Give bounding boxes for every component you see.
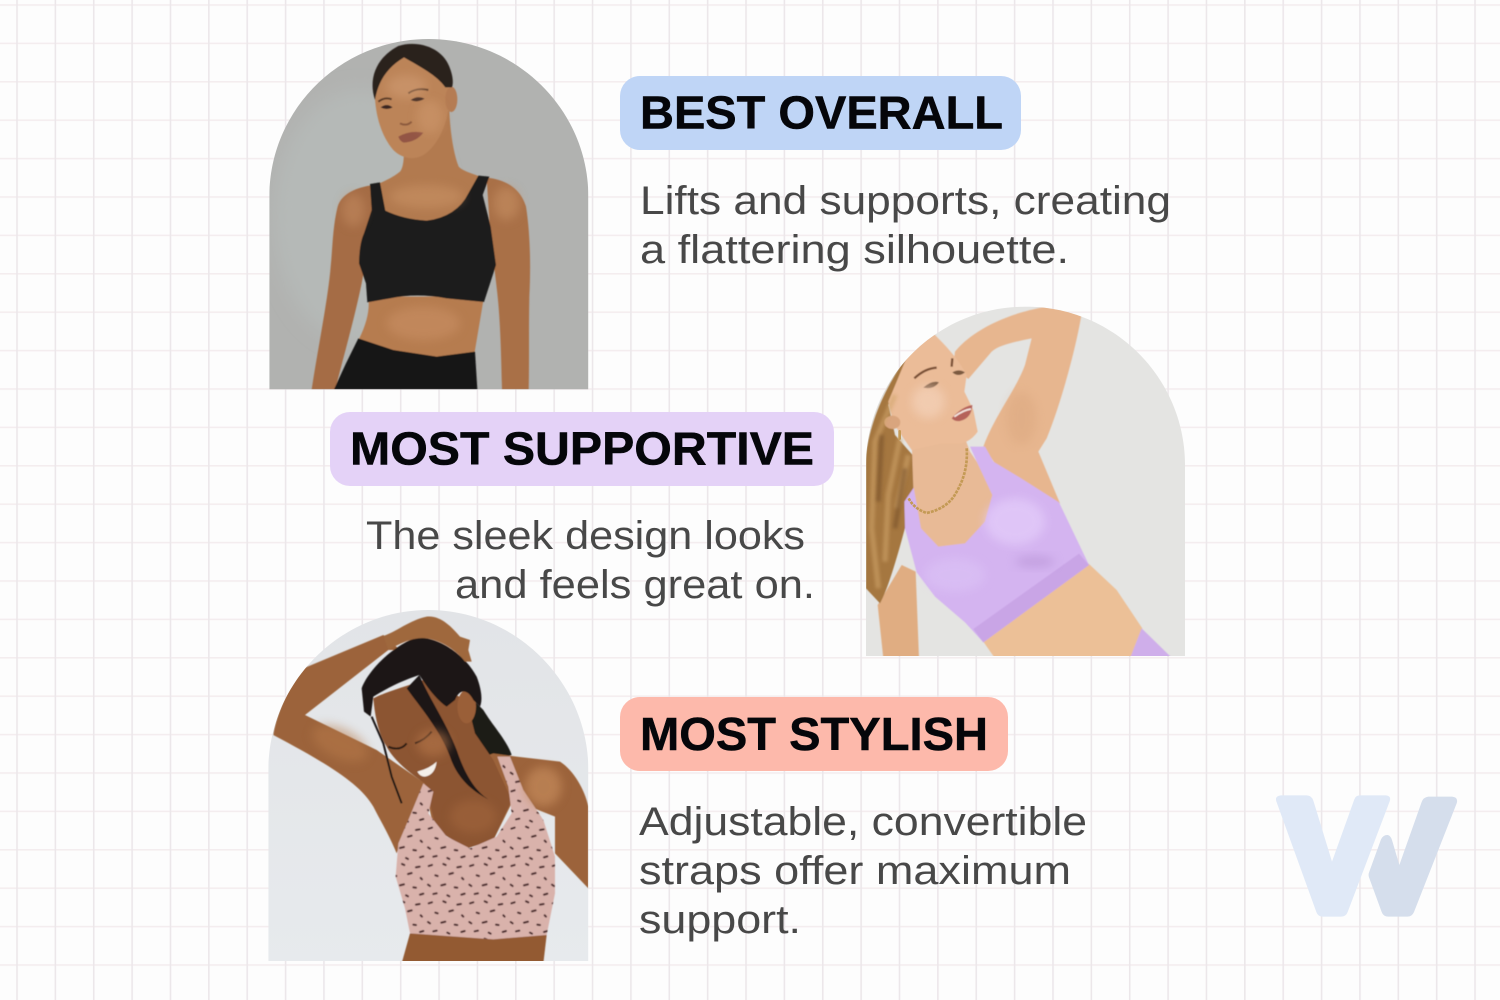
ponytail	[471, 702, 512, 756]
left arm	[312, 185, 375, 389]
earring	[898, 430, 901, 440]
left arm	[878, 565, 919, 658]
black waistband	[334, 338, 477, 389]
badge: most stylish: MOST STYLISH	[640, 708, 988, 760]
photo: woman in speckled pink sports bra	[268, 610, 588, 961]
text: best overall description: a flattering silhouette.	[640, 228, 1069, 272]
badge: best overall	[620, 76, 1021, 150]
neck and chest	[912, 438, 993, 548]
photo: woman in black sports bra	[269, 39, 588, 390]
text: most supportive description	[366, 514, 815, 607]
text: best overall description: Lifts and supports, creating	[640, 179, 1171, 223]
raised arm	[953, 307, 1082, 503]
black bra	[359, 176, 496, 302]
badge: most stylish	[620, 697, 1008, 771]
hair	[373, 44, 453, 100]
photo: woman in lavender sports bra	[866, 306, 1185, 656]
necklace	[908, 448, 967, 513]
speckled bra	[396, 757, 555, 939]
badge: best overall: BEST OVERALL	[640, 86, 1003, 138]
midriff	[359, 297, 484, 360]
face	[888, 332, 978, 450]
face	[375, 57, 450, 158]
text: most stylish description: support.	[639, 898, 801, 942]
lips	[398, 132, 423, 143]
badge: most supportive: MOST SUPPORTIVE	[350, 422, 814, 474]
raised arm and torso skin	[273, 635, 588, 888]
lavender bra	[904, 447, 1089, 642]
text: most supportive description: and feels great on.	[455, 563, 815, 607]
text: most stylish description: straps offer maximum	[639, 849, 1071, 893]
neck and chest	[379, 110, 479, 222]
hair	[362, 637, 481, 717]
icon: W watermark logo	[1276, 795, 1457, 917]
smile	[417, 762, 437, 777]
text: best overall description	[640, 179, 1171, 272]
text: most stylish description: Adjustable, convertible	[639, 800, 1087, 844]
shorts	[1130, 628, 1172, 658]
hair strand	[407, 675, 488, 799]
eyes and mouth	[923, 370, 965, 388]
bra hem	[973, 554, 1089, 642]
ear	[884, 416, 900, 429]
eyes	[381, 97, 425, 109]
text: most stylish description	[639, 800, 1087, 942]
right arm	[487, 178, 530, 389]
badge: most supportive	[330, 412, 834, 486]
hair	[866, 360, 914, 604]
face and neck	[373, 680, 512, 848]
torso	[983, 563, 1142, 658]
lower torso	[402, 933, 547, 963]
text: most supportive description: The sleek design looks	[366, 514, 805, 558]
hand on head	[383, 617, 472, 662]
